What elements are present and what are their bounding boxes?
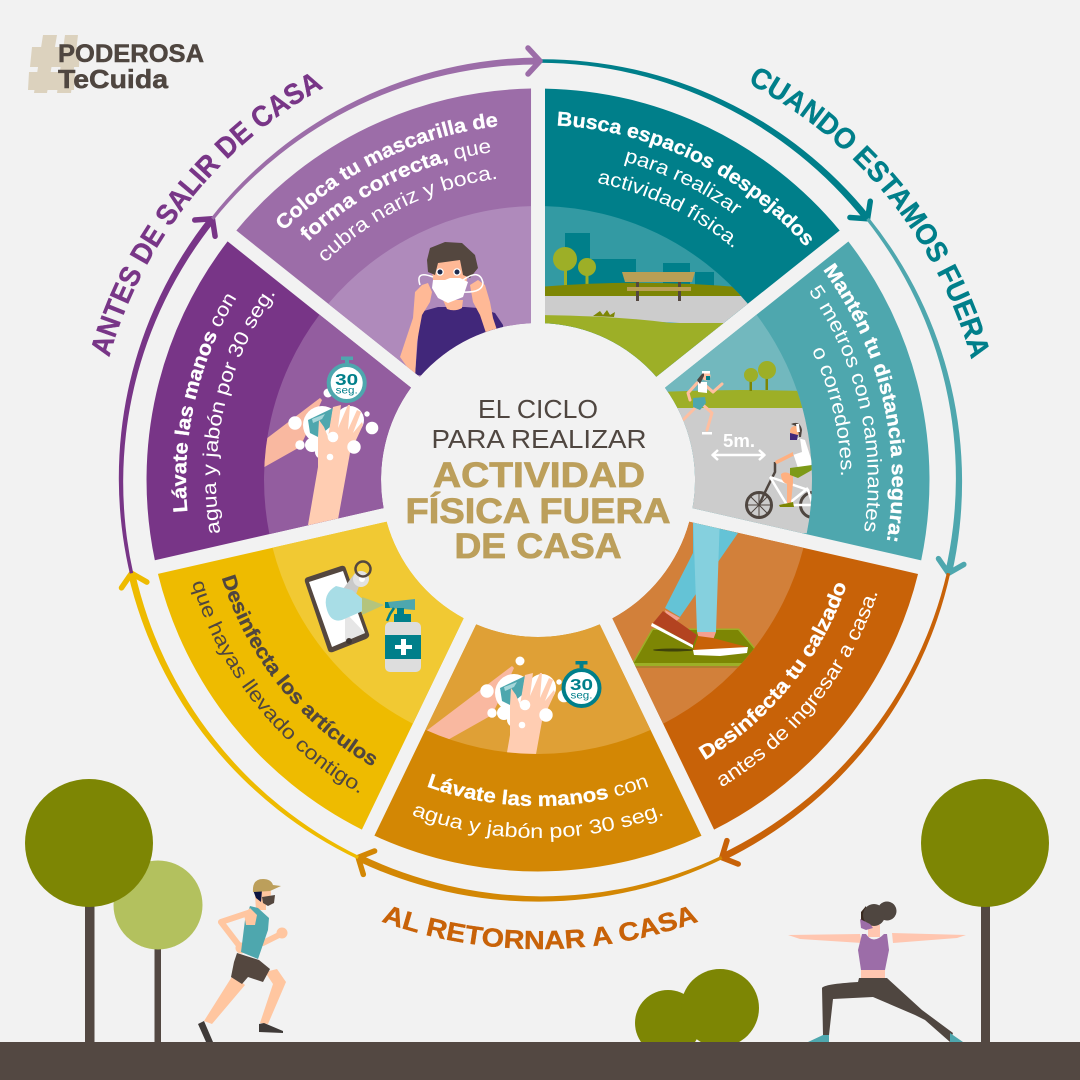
tree right (921, 779, 1049, 1045)
icon: stopwatch 30 seg (564, 661, 600, 706)
icon: stopwatch 30 seg: 30 (335, 372, 358, 389)
panel: busca espacios despejados (545, 88, 840, 377)
center title (406, 394, 670, 566)
text: desinfecta los artículos: Desinfecta los artículos (222, 574, 376, 766)
center title: EL CICLO (478, 394, 598, 424)
icon: runner and cyclist with 5m distance: 5m. (723, 431, 755, 451)
panel: mantén tu distancia segura (665, 242, 930, 560)
panel: lávate las manos (retorno) (374, 624, 702, 872)
text: mantén tu distancia: o corredores. (814, 348, 852, 475)
arrow: al retornar 2 (345, 708, 723, 1006)
text: lávate las manos retorno: agua y jabón por 30 seg. (413, 806, 663, 842)
yoga woman (788, 902, 966, 1042)
arrow: antes de salir 2 (211, 0, 553, 322)
arrow: al retornar 1 (712, 536, 950, 903)
panel: coloca tu mascarilla (236, 88, 532, 377)
text: lávate las manos antes: Lávate las manos con (171, 294, 236, 512)
text: desinfecta tu calzado: antes de ingresar a casa. (718, 593, 878, 786)
arrow: al retornar 3 (53, 562, 430, 859)
arrow: cuando estamos fuera 2 (738, 218, 1080, 586)
panel: desinfecta los artículos (158, 522, 464, 830)
text: busca espacios: Busca espacios despejados (558, 112, 812, 246)
arrow: cuando estamos fuera 1 (540, 59, 878, 227)
text: lávate las manos antes (171, 293, 275, 533)
runner man (198, 879, 288, 1042)
logo: #PoderosaTeCuida: TeCuida (58, 64, 169, 94)
panel: lávate las manos (antes) (146, 241, 411, 560)
center title: DE CASA (454, 527, 622, 566)
icon: hands washing (264, 388, 378, 525)
bush (635, 969, 759, 1042)
text: lávate las manos retorno (413, 774, 663, 842)
icon: stopwatch 30 seg (329, 356, 365, 401)
heading: antes de salir de casa: ANTES DE SALIR DE CASA (92, 74, 324, 358)
icon: stopwatch 30 seg: seg. (336, 384, 358, 396)
icon: man putting on mask (400, 242, 505, 380)
arrow: antes de salir 1 (55, 207, 293, 574)
text: lávate las manos antes: agua y jabón por 30 seg. (202, 293, 275, 533)
center title: FÍSICA FUERA (406, 491, 670, 531)
trees left (25, 779, 202, 1045)
text: desinfecta tu calzado: Desinfecta tu calzado (698, 583, 846, 760)
ground (0, 1042, 1080, 1080)
text: coloca tu mascarilla: cubra nariz y boca. (320, 170, 496, 260)
icon: stopwatch 30 seg: 30 (570, 677, 593, 694)
text: mantén tu distancia: Mantén tu distancia segura: (824, 262, 905, 542)
icon: phone, keys and spray (305, 562, 421, 672)
heading: al retornar a casa: AL RETORNAR A CASA (382, 906, 698, 950)
text: mantén tu distancia: 5 metros con caminantes (810, 284, 882, 532)
icon: park with bench (545, 233, 748, 377)
panel: desinfecta tu calzado (612, 522, 918, 830)
text: lávate las manos retorno: Lávate las manos con (428, 774, 648, 806)
center title: PARA REALIZAR (432, 424, 646, 454)
logo: #PoderosaTeCuida: PODEROSA (58, 40, 204, 68)
icon: runner and cyclist with 5m distance (668, 361, 812, 533)
text: coloca tu mascarilla: Coloca tu mascarilla de (276, 114, 498, 228)
text: busca espacios: para realizar (624, 152, 742, 214)
logo: #PoderosaTeCuida (28, 35, 204, 94)
icon: stopwatch 30 seg: seg. (570, 690, 592, 702)
icon: hands washing (427, 656, 567, 754)
text: coloca tu mascarilla: forma correcta, que (300, 142, 490, 241)
text: busca espacios: actividad física. (598, 173, 734, 248)
icon: shoes on disinfectant mat (630, 515, 757, 668)
text: desinfecta los artículos: que hayas llevado contigo. (190, 582, 360, 793)
heading: cuando estamos fuera: CUANDO ESTAMOS FUERA (752, 68, 989, 360)
center title: ACTIVIDAD (433, 456, 645, 495)
